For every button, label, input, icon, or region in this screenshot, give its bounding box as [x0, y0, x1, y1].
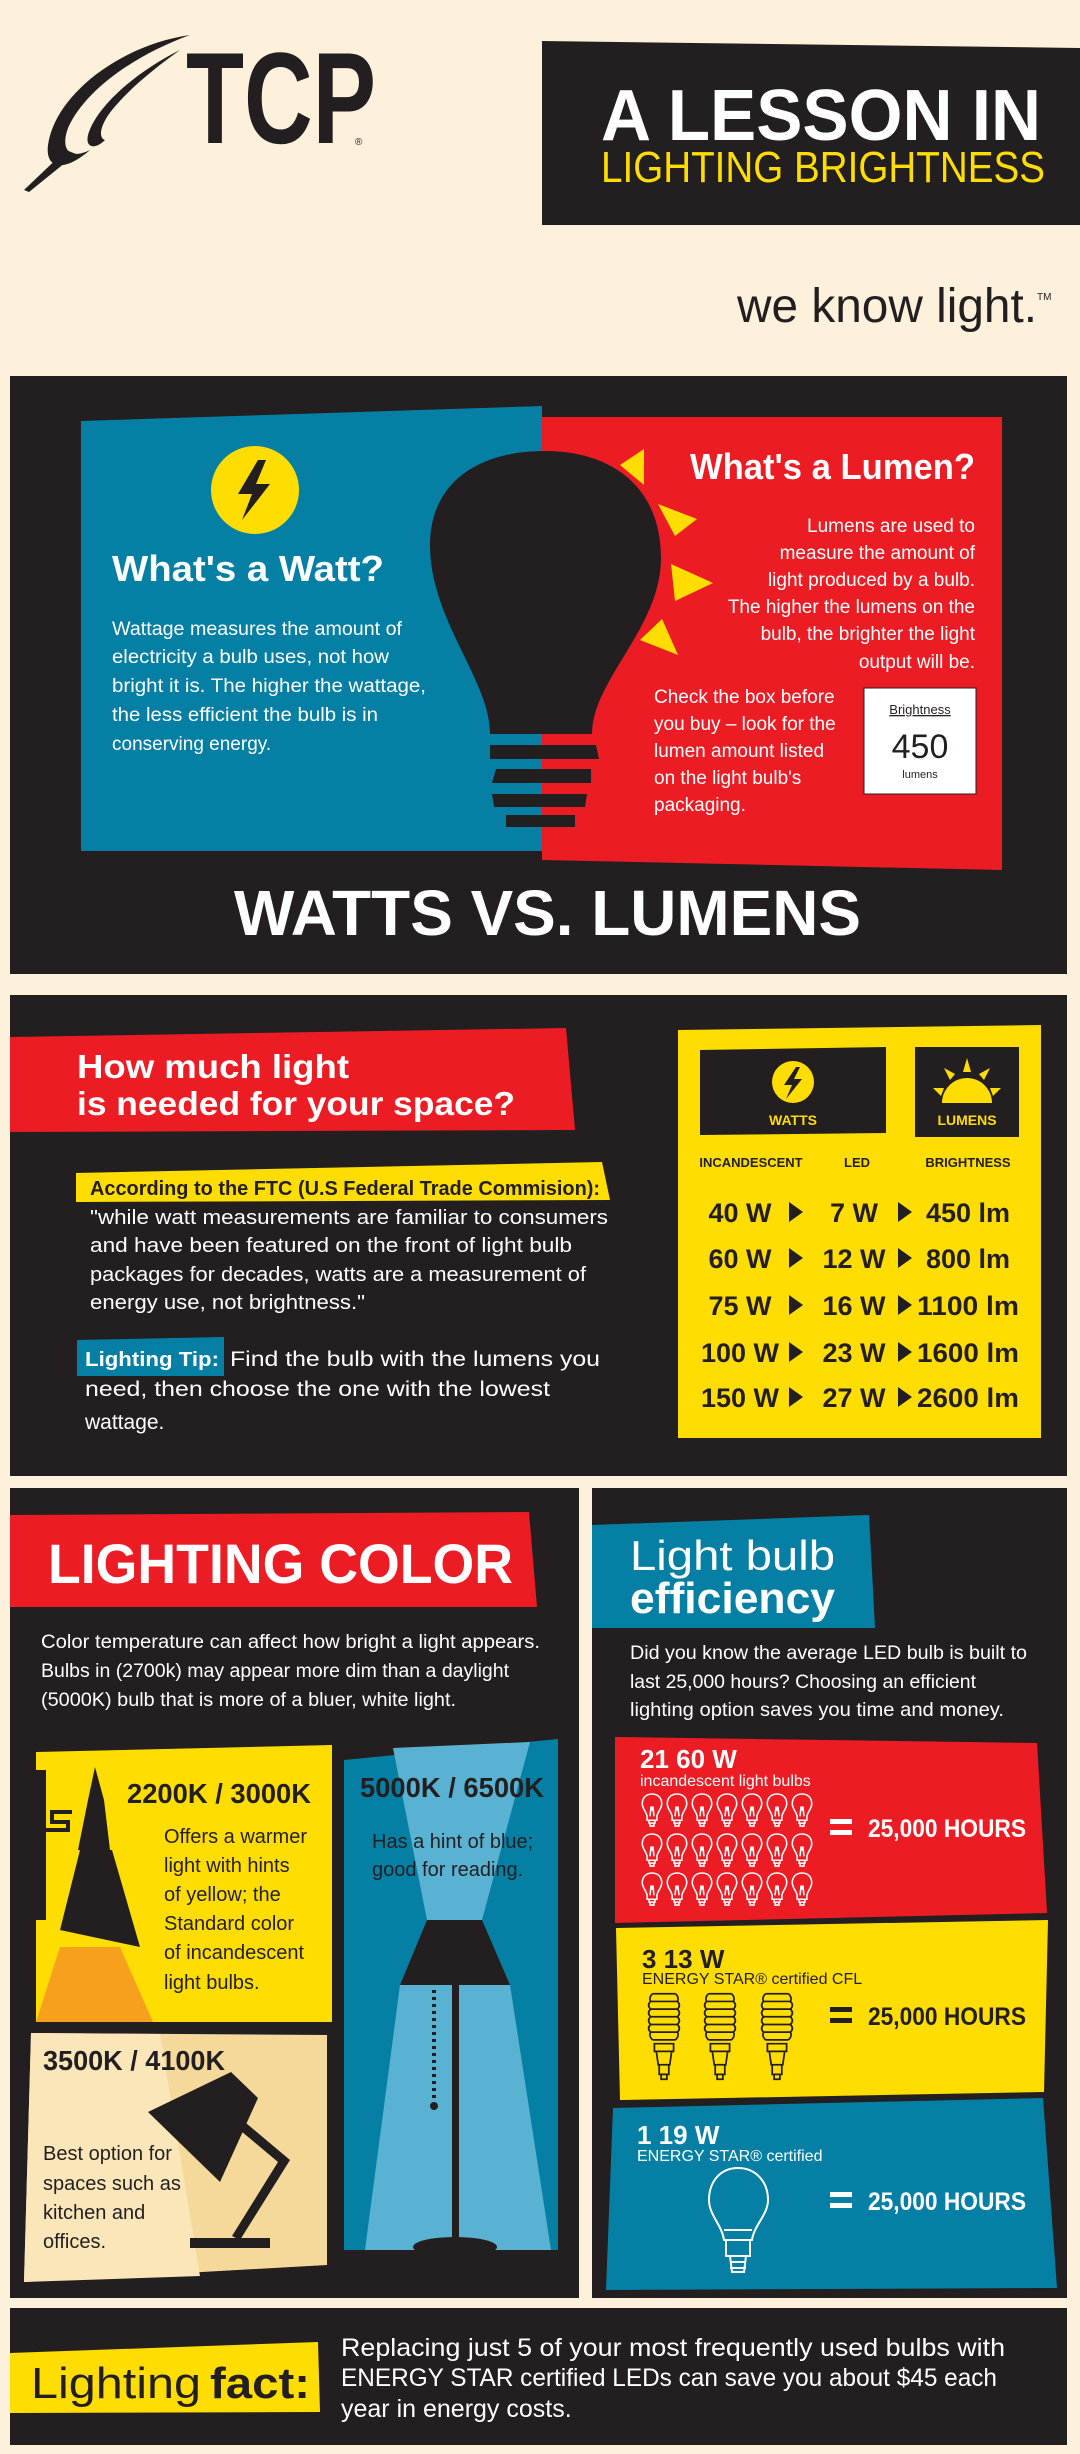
- lighting tip: wattage.: [84, 1411, 164, 1434]
- chart: watts to lumens table: 2600 lm: [917, 1383, 1019, 1413]
- panel: lighting fact: Lighting: [31, 2359, 201, 2408]
- card: LED: 25,000 HOURS: [868, 2188, 1026, 2216]
- chart: watts to lumens table: 1600 lm: [917, 1338, 1019, 1368]
- card: 5000K: [344, 1739, 558, 2257]
- icon: watts: WATTS: [769, 1112, 817, 1128]
- logo: TCP: TCP: [186, 25, 376, 171]
- heading banner: How much light: [77, 1048, 349, 1085]
- panel: how much light: [10, 995, 1067, 1476]
- heading: [10, 1512, 537, 1607]
- watt panel: What's a Watt?: [112, 548, 384, 589]
- chart: watts to lumens table: 7 W: [830, 1198, 879, 1228]
- card: LED: ENERGY STAR® certified: [637, 2148, 822, 2165]
- FTC quote: According to the FTC (U.S Federal Trade Commision):: [90, 1178, 600, 1200]
- card: CFL: 25,000 HOURS: [868, 2003, 1026, 2031]
- lumen panel: light produced by a bulb.: [768, 570, 975, 591]
- chart: watts to lumens table: BRIGHTNESS: [925, 1155, 1011, 1170]
- card: incandescent: incandescent light bulbs: [640, 1773, 811, 1790]
- FTC quote: energy use, not brightness.": [90, 1292, 365, 1314]
- card: 2200K: 2200K / 3000K: [127, 1778, 311, 1809]
- card: 3500K: spaces such as: [43, 2173, 181, 2195]
- card: 2200K: light with hints: [164, 1855, 290, 1877]
- chart: watts to lumens table: [678, 1025, 1041, 1438]
- lumen panel: lumen amount listed: [654, 741, 824, 762]
- chart: watts to lumens table: INCANDESCENT: [699, 1155, 803, 1170]
- card: 3500K: offices.: [43, 2231, 106, 2253]
- lumen panel: measure the amount of: [780, 543, 976, 564]
- card: LED: 1 19 W: [637, 2120, 720, 2150]
- card: 3500K: 3500K / 4100K: [43, 2045, 225, 2076]
- panel: lighting fact: fact:: [210, 2359, 310, 2408]
- chart: watts to lumens table: 100 W: [701, 1338, 780, 1368]
- panel: lighting color: Bulbs in (2700k) may appear more dim than a daylight: [41, 1661, 510, 1682]
- panel: lighting color: (5000K) bulb that is more of a bluer, white light.: [41, 1690, 456, 1711]
- card: 5000K: good for reading.: [372, 1859, 523, 1881]
- card: 3500K: Best option for: [43, 2143, 172, 2165]
- card: CFL: [616, 1920, 1048, 2100]
- heading banner: [10, 1028, 575, 1132]
- card: 5000K: 5000K / 6500K: [360, 1772, 544, 1803]
- brightness label box: [864, 688, 976, 794]
- icon: lightning circle: [211, 446, 299, 534]
- panel: lighting color: Color temperature can affect how bright a light appears.: [41, 1632, 540, 1653]
- heading banner: is needed for your space?: [77, 1085, 515, 1122]
- card: incandescent: [615, 1737, 1047, 1923]
- chart: watts to lumens table: 450 lm: [926, 1198, 1010, 1228]
- heading: Light bulb: [630, 1532, 835, 1579]
- chart: watts to lumens table: 23 W: [822, 1338, 886, 1368]
- card: incandescent: 25,000 HOURS: [868, 1815, 1026, 1843]
- title box: [542, 41, 1080, 225]
- lighting tip: Find the bulb with the lumens you: [230, 1348, 600, 1371]
- FTC quote: [76, 1162, 610, 1314]
- watt panel: Wattage measures the amount of: [112, 619, 403, 640]
- lumen panel: The higher the lumens on the: [728, 597, 975, 618]
- chart: watts to lumens table: 27 W: [822, 1383, 886, 1413]
- panel: lighting color: [10, 1488, 579, 2298]
- panel: light bulb efficiency: [592, 1488, 1067, 2298]
- chart: watts to lumens table: 12 W: [822, 1244, 886, 1274]
- chart: watts to lumens table: 40 W: [708, 1198, 772, 1228]
- panel: watts vs lumens: WATTS VS. LUMENS: [234, 877, 861, 949]
- panel: lighting fact: Replacing just 5 of your most frequently used bulbs with: [341, 2334, 1005, 2362]
- lumen panel: packaging.: [654, 795, 746, 816]
- lumen panel: Check the box before: [654, 687, 835, 708]
- lumen panel: Lumens are used to: [807, 516, 975, 537]
- lumen panel: you buy – look for the: [654, 714, 836, 735]
- watt panel: bright it is. The higher the wattage,: [112, 676, 426, 697]
- heading: efficiency: [630, 1574, 836, 1623]
- panel: lighting fact: ENERGY STAR certified LEDs can save you about $45 each: [341, 2364, 997, 2392]
- card: 2200K: [36, 1745, 332, 2022]
- chart: watts to lumens table: 16 W: [822, 1291, 886, 1321]
- FTC quote: packages for decades, watts are a measurement of: [90, 1264, 586, 1286]
- lumen panel: [542, 417, 1002, 870]
- card: 3500K: [24, 2033, 327, 2282]
- lumen panel: on the light bulb's: [654, 768, 801, 789]
- chart: watts to lumens table: LED: [844, 1155, 870, 1170]
- card: LED: [606, 2098, 1057, 2290]
- lighting tip: Lighting Tip:: [85, 1349, 219, 1371]
- chart: watts to lumens table: 800 lm: [926, 1244, 1010, 1274]
- card: 2200K: light bulbs.: [164, 1972, 260, 1994]
- logo: TCP: [24, 25, 376, 192]
- FTC quote: and have been featured on the front of light bulb: [90, 1235, 572, 1257]
- watt panel: electricity a bulb uses, not how: [112, 647, 389, 668]
- chart: watts to lumens table: 75 W: [708, 1291, 772, 1321]
- chart: watts to lumens table: 60 W: [708, 1244, 772, 1274]
- panel: light bulb efficiency: lighting option saves you time and money.: [630, 1700, 1004, 1721]
- brightness label box: lumens: [902, 769, 938, 781]
- card: 2200K: of incandescent: [164, 1942, 305, 1964]
- card: 2200K: of yellow; the: [164, 1884, 281, 1906]
- card: 5000K: Has a hint of blue;: [372, 1831, 533, 1853]
- card: CFL: ENERGY STAR® certified CFL: [642, 1971, 862, 1988]
- lumen panel: What's a Lumen?: [690, 446, 975, 487]
- panel: light bulb efficiency: Did you know the average LED bulb is built to: [630, 1643, 1027, 1664]
- icon: light bulb silhouette: [430, 451, 661, 827]
- title box: A LESSON IN: [601, 76, 1041, 156]
- panel: watts vs lumens: [10, 376, 1067, 974]
- heading: [592, 1515, 875, 1628]
- tagline: we know light.: [736, 280, 1037, 333]
- chart: watts to lumens table: 150 W: [701, 1383, 780, 1413]
- tagline: TM: [1037, 292, 1051, 303]
- FTC quote: "while watt measurements are familiar to consumers: [90, 1207, 608, 1229]
- logo: TCP: ®: [355, 137, 363, 148]
- card: incandescent: 21 60 W: [640, 1744, 737, 1774]
- icon: lumens: [915, 1047, 1019, 1137]
- icon: watts: [700, 1047, 886, 1135]
- card: CFL: 3 13 W: [642, 1944, 725, 1974]
- heading: LIGHTING COLOR: [48, 1532, 513, 1595]
- lumen panel: bulb, the brighter the light: [761, 624, 976, 645]
- card: 3500K: kitchen and: [43, 2202, 145, 2224]
- lighting tip: [77, 1337, 600, 1434]
- watt panel: [81, 406, 542, 851]
- watt panel: the less efficient the bulb is in: [112, 705, 378, 726]
- watt panel: conserving energy.: [112, 734, 271, 755]
- lumen panel: output will be.: [859, 652, 975, 673]
- brightness label box: Brightness: [889, 702, 951, 717]
- card: 2200K: Offers a warmer: [164, 1826, 307, 1848]
- card: 2200K: Standard color: [164, 1913, 294, 1935]
- brightness label box: 450: [892, 728, 948, 766]
- icon: lumens: LUMENS: [937, 1112, 997, 1128]
- chart: watts to lumens table: 1100 lm: [917, 1291, 1019, 1321]
- panel: lighting fact: [10, 2308, 1067, 2445]
- lighting tip: need, then choose the one with the lowest: [85, 1378, 550, 1401]
- panel: lighting fact: year in energy costs.: [341, 2395, 572, 2423]
- icon: light rays: [620, 449, 713, 655]
- panel: light bulb efficiency: last 25,000 hours? Choosing an efficient: [630, 1672, 977, 1693]
